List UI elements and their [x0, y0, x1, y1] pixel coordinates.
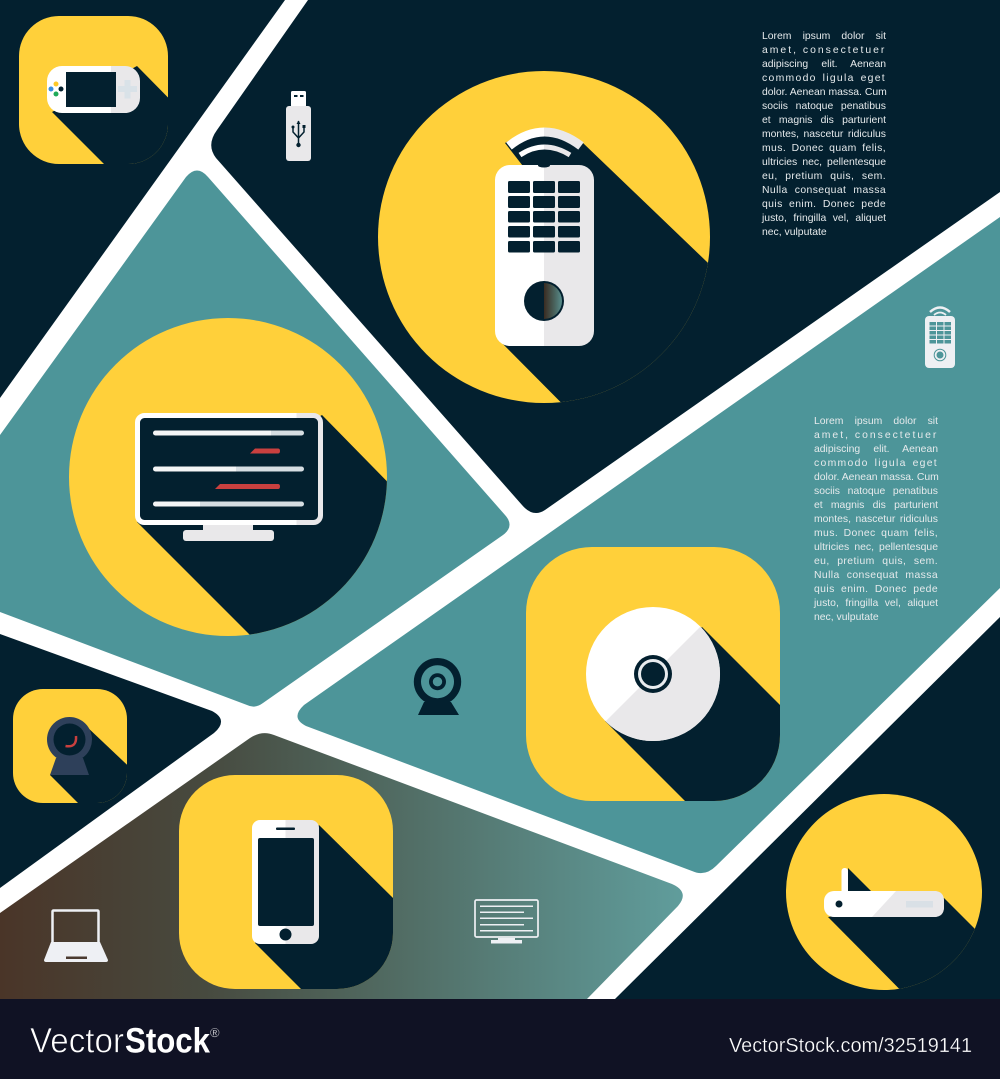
panel: lower-right dark	[615, 617, 1000, 999]
text block: right teal panel: justo, fringilla vel, aliquet	[814, 598, 938, 609]
text block: right teal panel: montes, nascetur ridiculus	[814, 514, 938, 525]
icon: webcam small	[414, 658, 461, 715]
text block: top right: montes, nascetur ridiculus	[762, 129, 886, 140]
icon: monitor small	[475, 900, 538, 944]
text block: right teal panel: commodo ligula eget	[814, 458, 938, 469]
text block: right teal panel: et magnis dis parturient	[814, 500, 938, 511]
panel: lower-left dark	[0, 634, 221, 888]
footer registered mark: ®	[210, 1025, 220, 1040]
footer logo: Vector: Vector	[30, 1022, 124, 1060]
footer bar	[0, 999, 1000, 1079]
panel: top dark	[211, 0, 1000, 513]
icon: monitor badge	[69, 318, 387, 636]
text block: right teal panel: sociis natoque penatibus	[814, 486, 938, 497]
icon: remote control badge	[378, 71, 710, 403]
icon: smartphone badge	[179, 775, 393, 989]
text block: top right: sociis natoque penatibus	[762, 101, 886, 112]
text block: top right: Nulla consequat massa	[762, 185, 886, 196]
text block: right teal panel: quis enim. Donec pede	[814, 584, 938, 595]
text block: top right: dolor. Aenean massa. Cum	[762, 87, 887, 98]
text block: top right: eu, pretium quis, sem.	[762, 171, 886, 182]
footer logo: Stock: Stock	[125, 1022, 210, 1060]
icon: USB stick	[286, 91, 311, 161]
footer image id: VectorStock.com/32519141	[729, 1035, 972, 1057]
text block: right teal panel: nec, vulputate	[814, 612, 879, 623]
icon: router badge	[786, 794, 982, 990]
text block: top right: amet, consectetuer	[762, 45, 886, 56]
panel: right teal	[297, 217, 1000, 873]
text block: right teal panel: amet, consectetuer	[814, 430, 938, 441]
text block: right teal panel: dolor. Aenean massa. Cum	[814, 472, 939, 483]
icon: CD disc badge	[526, 547, 780, 801]
text block: right teal panel: Lorem ipsum dolor sit	[814, 416, 938, 427]
icon: game console badge	[19, 16, 168, 164]
panel: bottom gradient	[0, 733, 683, 999]
text block: top right	[762, 31, 887, 238]
text block: right teal panel: Nulla consequat massa	[814, 570, 938, 581]
text block: top right: adipiscing elit. Aenean	[762, 59, 886, 70]
text block: top right: commodo ligula eget	[762, 73, 886, 84]
text block: right teal panel: mus. Donec quam felis,	[814, 528, 938, 539]
panel: top-left dark	[0, 0, 285, 398]
text block: top right: justo, fringilla vel, aliquet	[762, 213, 886, 224]
text block: right teal panel: adipiscing elit. Aenean	[814, 444, 938, 455]
text block: top right: et magnis dis parturient	[762, 115, 886, 126]
icon: laptop	[44, 910, 108, 962]
text block: right teal panel: ultricies nec, pellentesque	[814, 542, 938, 553]
text block: top right: nec, vulputate	[762, 227, 827, 238]
text block: top right: ultricies nec, pellentesque	[762, 157, 886, 168]
text block: top right: quis enim. Donec pede	[762, 199, 886, 210]
text block: right teal panel	[814, 416, 939, 623]
text block: top right: Lorem ipsum dolor sit	[762, 31, 886, 42]
icon: remote small	[925, 308, 955, 368]
icon: webcam badge	[13, 689, 127, 803]
text block: right teal panel: eu, pretium quis, sem.	[814, 556, 938, 567]
text block: top right: mus. Donec quam felis,	[762, 143, 886, 154]
panel: left teal	[0, 170, 510, 707]
